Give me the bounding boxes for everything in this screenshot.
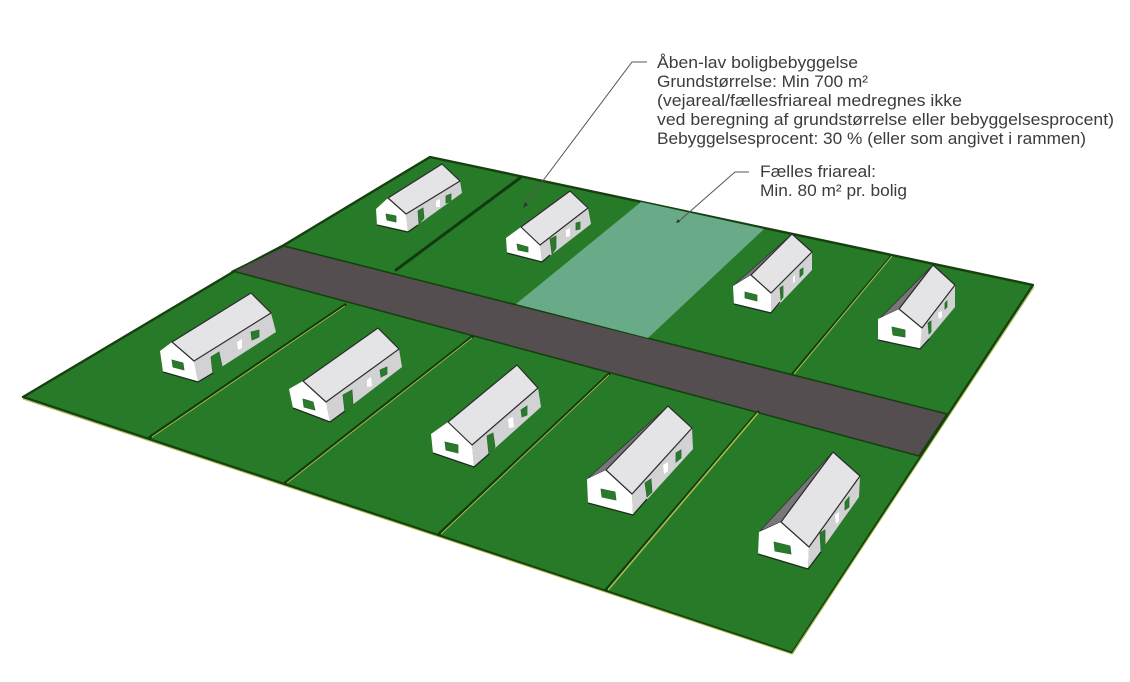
- text: shared open space requirement: Min. 80 m² pr. bolig: [760, 182, 907, 200]
- text: housing requirements: ved beregning af grundstørrelse eller bebyggelsesprocent): [657, 111, 1114, 129]
- text: shared open space requirement: Fælles friareal:: [760, 163, 876, 181]
- text: housing requirements: Bebyggelsesprocent: 30 % (eller som angivet i rammen): [657, 130, 1086, 148]
- text: housing requirements: Åben-lav boligbebyggelse: [657, 53, 858, 72]
- plot dividers: [150, 178, 892, 590]
- text: shared open space requirement: [760, 163, 907, 200]
- shared open space: [516, 202, 764, 338]
- house: front row 3: [431, 365, 541, 467]
- house: front row 5: [758, 452, 860, 569]
- house: back row 3: [733, 234, 812, 313]
- house: front row 4: [587, 406, 693, 515]
- ground plane: [23, 157, 1033, 653]
- house: back row 2: [506, 191, 591, 262]
- house: back row 4: [878, 265, 955, 349]
- house: front row 1: [160, 293, 276, 382]
- text: housing requirements: (vejareal/fællesfriareal medregnes ikke: [657, 92, 962, 110]
- house: back row 1: [376, 164, 462, 232]
- ground edge highlight: [23, 287, 1034, 654]
- leader line: housing plot: [523, 62, 647, 208]
- house: front row 2: [289, 328, 402, 422]
- road: [233, 246, 947, 456]
- leader line: shared open space: [676, 172, 749, 223]
- text: housing requirements: [657, 53, 1114, 148]
- text: housing requirements: Grundstørrelse: Min 700 m²: [657, 73, 869, 91]
